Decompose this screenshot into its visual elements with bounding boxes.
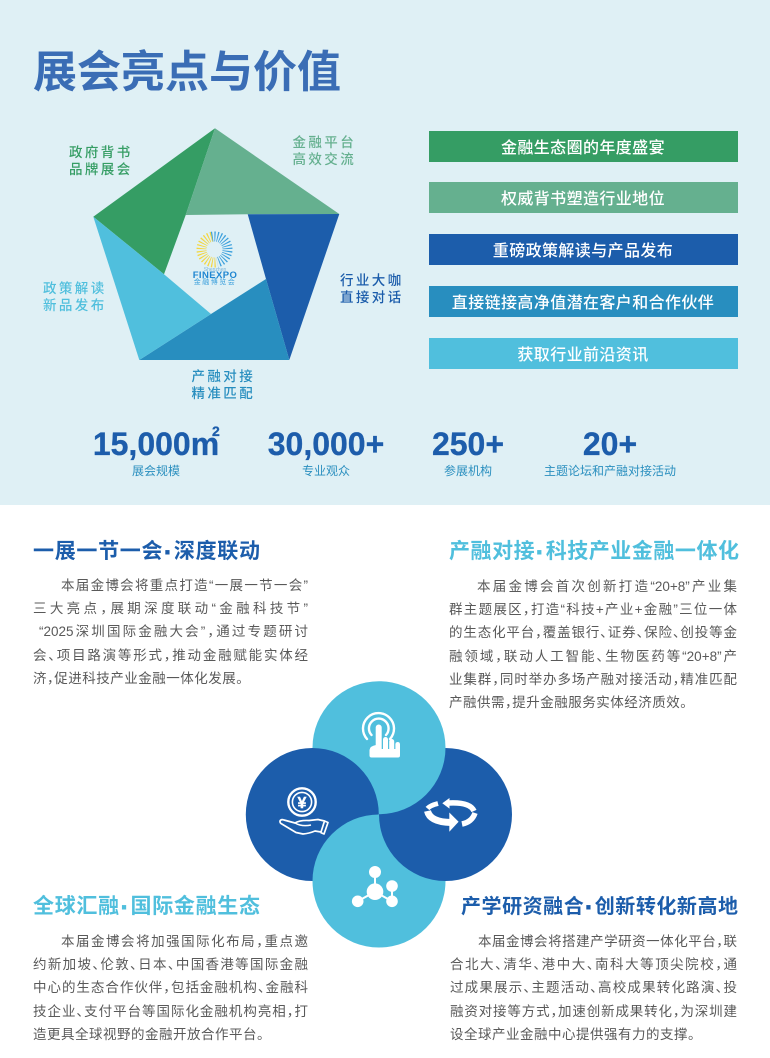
text: bottom right: 设全球产业金融中心提供强有力的支撑。 <box>450 1027 695 1042</box>
icon: yen in hand <box>280 788 328 834</box>
value bar 3: 重磅政策解读与产品发布 <box>493 243 673 260</box>
stat: exhibition area <box>93 423 220 478</box>
pentagon label: policy <box>43 280 107 312</box>
text: top right: 本届金博会首次创新打造“20+8”产业集 <box>477 578 737 594</box>
logo: FINEXPO sunburst: Shenzhen <box>204 267 226 273</box>
logo: FINEXPO sunburst <box>193 234 237 286</box>
pentagon label: platform: 高效交流 <box>292 152 356 166</box>
text: top left: 三大亮点，展期深度联动“金融科技节” <box>33 601 308 616</box>
segment: mid blue <box>139 279 289 360</box>
text: top left: “2025深圳国际金融大会”，通过专题研讨 <box>39 624 308 639</box>
text: bottom right <box>450 934 737 1042</box>
icon: molecule <box>352 866 398 907</box>
value bar 4: 直接链接高净值潜在客户和合作伙伴 <box>452 295 714 312</box>
text: top left: 会、项目路演等形式，推动金融赋能实体经 <box>33 648 308 663</box>
pentagon label: matching <box>192 368 255 400</box>
pentagon diagram <box>93 128 340 360</box>
heading: top left: 一展一节一会·深度联动 <box>33 536 260 569</box>
stat: forums: 20+ <box>583 426 637 462</box>
text: top right: 的生态化平台，覆盖银行、证券、保险、创投等金 <box>449 625 737 640</box>
text: top right: 产融供需，提升金融服务实体经济质效。 <box>449 695 688 710</box>
stat: exhibition area: 2 <box>212 423 220 439</box>
pentagon label: government <box>69 144 133 176</box>
icon: rotate arrows <box>428 798 475 832</box>
stat: exhibition area: 15,000m <box>93 426 219 462</box>
pentagon label: speakers: 行业大咖 <box>340 272 404 288</box>
text: bottom left: 技企业、支付平台等国际化金融机构亮相，打 <box>33 1004 308 1019</box>
stat: visitors: 30,000+ <box>268 426 384 462</box>
pentagon label: government: 政府背书 <box>69 144 133 160</box>
text: bottom left: 本届金博会将加强国际化布局，重点邀 <box>61 934 308 948</box>
value bar 5 <box>428 338 738 368</box>
text: top right: 群主题展区，打造“科技+产业+金融”三位一体 <box>449 602 737 617</box>
stat: forums: 主题论坛和产融对接活动 <box>544 464 676 478</box>
logo: FINEXPO sunburst: FINEXPO <box>193 270 237 281</box>
text: top left: 济，促进科技产业金融一体化发展。 <box>33 671 244 686</box>
icon: yen in hand: ¥ <box>298 795 307 812</box>
text: bottom left <box>33 934 308 1042</box>
text: top left <box>33 578 308 686</box>
circle: bottom <box>312 814 446 948</box>
stat: exhibition area: 展会规模 <box>132 464 180 478</box>
circle: right <box>379 748 512 881</box>
icon: touch <box>363 713 400 758</box>
value bar 5: 获取行业前沿资讯 <box>517 346 649 364</box>
circle: left <box>246 748 379 881</box>
text: bottom right: 过成果展示、主题活动、高校成果转化路演、投 <box>450 980 737 995</box>
title: 展会亮点与价值 <box>33 48 341 97</box>
text: top left: 本届金博会将重点打造“一展一节一会” <box>61 578 308 592</box>
text: bottom left: 造更具全球视野的金融开放合作平台。 <box>33 1027 264 1042</box>
pentagon label: matching: 精准匹配 <box>192 386 255 400</box>
text: top right: 业集群，同时举办多场产融对接活动，精准匹配 <box>449 672 737 687</box>
heading: bottom left: 全球汇融·国际金融生态 <box>33 890 260 924</box>
text: bottom right: 融资对接等方式，加速创新成果转化，为深圳建 <box>450 1004 737 1019</box>
pentagon label: speakers: 直接对话 <box>340 290 404 304</box>
text: bottom right: 本届金博会将搭建产学研资一体化平台，联 <box>478 934 737 948</box>
heading: bottom right: 产学研资融合·创新转化新高地 <box>461 890 738 924</box>
text: bottom left: 中心的生态合作伙伴，包括金融机构、金融科 <box>33 980 308 995</box>
text: bottom left: 约新加坡、伦敦、日本、中国香港等国际金融 <box>33 957 308 972</box>
pentagon label: policy: 政策解读 <box>43 280 107 296</box>
logo: FINEXPO sunburst: 金融博览会 <box>194 277 236 286</box>
panel: header background <box>0 0 770 505</box>
stat: institutions <box>432 426 504 478</box>
heading: top right: 产融对接·科技产业金融一体化 <box>449 536 739 569</box>
text: bottom right: 合北大、清华、港中大、南科大等顶尖院校，通 <box>450 957 737 972</box>
value bar 3 <box>428 234 738 265</box>
overlap: top over right <box>379 748 446 814</box>
value bar 1: 金融生态圈的年度盛宴 <box>501 140 665 157</box>
value bar 2 <box>428 182 738 213</box>
segment: light green <box>186 128 339 215</box>
pentagon label: government: 品牌展会 <box>69 162 133 176</box>
pentagon label: matching: 产融对接 <box>192 368 255 384</box>
pentagon label: platform <box>292 134 356 166</box>
stat: institutions: 参展机构 <box>444 464 492 478</box>
text: top right: 融领域，联动人工智能、生物医药等“20+8”产 <box>449 649 737 664</box>
segment: dark blue <box>248 214 339 360</box>
segment: light blue <box>93 217 211 360</box>
stat: visitors: 专业观众 <box>302 464 350 478</box>
stat: institutions: 250+ <box>432 426 504 462</box>
overlap: right over bottom <box>379 814 446 881</box>
pentagon label: platform: 金融平台 <box>292 134 356 150</box>
value bar 4 <box>428 286 738 317</box>
value bar 2: 权威背书塑造行业地位 <box>501 191 665 208</box>
text: top right <box>449 578 737 710</box>
segment: dark green <box>93 128 215 274</box>
circle: top <box>312 681 446 814</box>
value bar 1 <box>428 131 738 162</box>
pentagon label: speakers <box>340 272 404 304</box>
stat: forums <box>544 426 676 478</box>
stat: visitors <box>268 426 384 478</box>
pentagon label: policy: 新品发布 <box>43 298 107 312</box>
